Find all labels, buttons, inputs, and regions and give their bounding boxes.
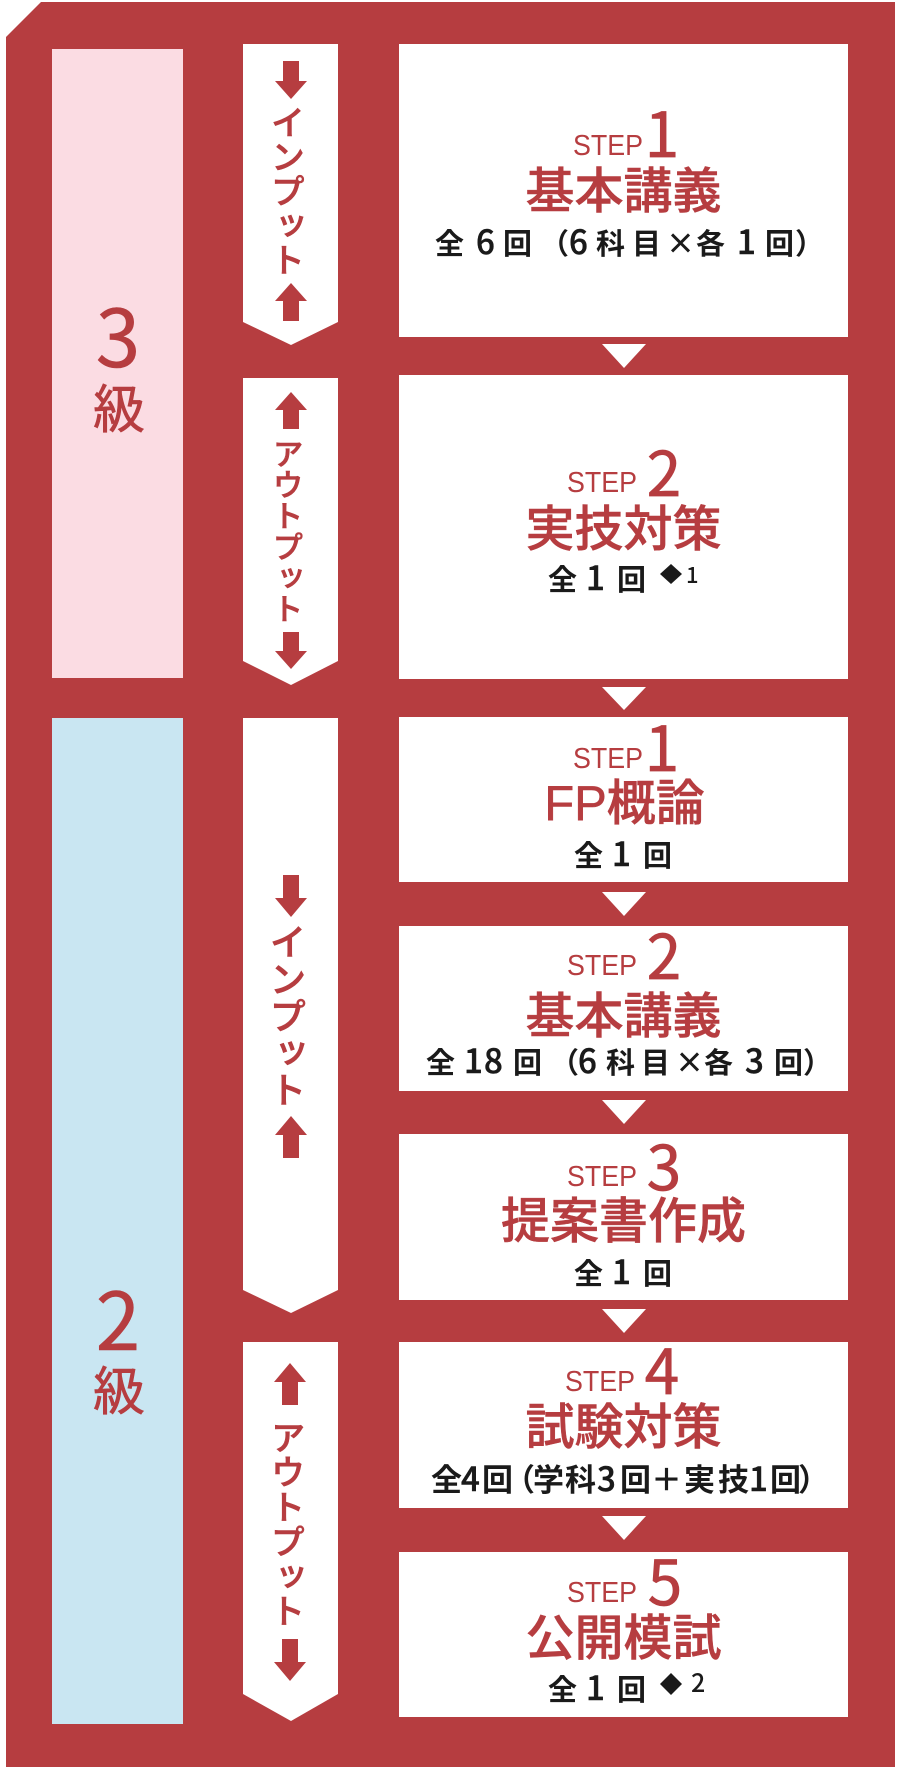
grade 2 step 5: 2 (691, 1664, 705, 1700)
ribbon: input grade 2 (243, 718, 338, 1313)
grade 2 step 3: STEP (567, 1161, 637, 1193)
grade 2 step 4: STEP (565, 1366, 635, 1398)
grade 2 step 3: 提案書作成 (501, 1195, 746, 1249)
grade 3 step 2: STEP (567, 467, 637, 499)
arrow (602, 1100, 646, 1124)
grade 2 step 3 (399, 1118, 848, 1300)
ribbon: output grade 3 (243, 378, 338, 685)
grade 3 step 2: 全 1 回 (548, 552, 646, 600)
grade 3 step 1: STEP (573, 130, 643, 162)
grade 2 step 5: 公開模試 (525, 1612, 722, 1666)
grade 3 step 1: 基本講義 (525, 165, 722, 219)
grade 2 step 2 (399, 907, 848, 1091)
arrow (602, 1516, 646, 1540)
grade 2 step 1: FP概論 (544, 777, 705, 831)
arrow (602, 1309, 646, 1333)
grade 3 step 2 (399, 375, 848, 679)
grade 2 step 1: STEP (573, 743, 643, 775)
grade 2 step 4: 試験対策 (525, 1401, 722, 1455)
panel: grade 3 (52, 49, 183, 678)
grade 2 step 5: 全 1 回 (548, 1662, 646, 1710)
arrow (602, 687, 646, 710)
arrow (602, 344, 646, 368)
grade 2 step 5: 5 (648, 1533, 682, 1623)
grade 2 step 4 (399, 1322, 848, 1508)
grade 2 label: 級 (93, 1350, 145, 1425)
grade 2 step 2: STEP (567, 950, 637, 982)
ribbon: input grade 3: インプット (263, 105, 313, 277)
grade 2 step 1: 1 (645, 699, 679, 789)
grade 2 step 2: 2 (647, 907, 681, 997)
ribbon: output grade 3: アウトプット (266, 438, 310, 624)
grade 2 step 5 (399, 1533, 848, 1717)
arrow (602, 892, 646, 916)
grade 2 label (93, 1258, 145, 1425)
ribbon: input grade 3 (243, 44, 338, 345)
ribbon: output grade 2: アウトプット (263, 1420, 313, 1628)
grade 2 step 4: 全4回（学科3回＋実技1回） (431, 1453, 829, 1501)
grade 3 label: 級 (93, 368, 145, 443)
grade 2 step 5: STEP (567, 1577, 637, 1609)
panel: grade 2 (52, 718, 183, 1724)
grade 3 step 2: 2 (647, 424, 681, 514)
grade 2 step 1 (399, 699, 848, 882)
grade 2 step 2: 基本講義 (525, 990, 722, 1044)
grade 2 step 1: 全 1 回 (574, 828, 672, 876)
ribbon: input grade 2: インプット (261, 923, 315, 1108)
grade 3 step 1: 1 (645, 85, 679, 175)
grade 2 label: 2 (96, 1258, 140, 1374)
grade 2 step 3: 3 (647, 1118, 681, 1208)
ribbon: output grade 2 (243, 1342, 338, 1721)
grade 2 step 2: 全 18 回（6 科目×各 3 回） (426, 1035, 832, 1083)
grade 2 step 3: 全 1 回 (574, 1246, 672, 1294)
grade 3 label (93, 275, 145, 443)
grade 2 step 4: 4 (645, 1322, 679, 1412)
grade 3 label: 3 (96, 275, 140, 391)
grade 3 step 2: 1 (686, 558, 699, 590)
grade 3 step 1: 全 6 回（6 科目×各 1 回） (435, 216, 824, 264)
grade 3 step 1 (399, 44, 848, 337)
grade 3 step 2: 実技対策 (525, 503, 722, 557)
